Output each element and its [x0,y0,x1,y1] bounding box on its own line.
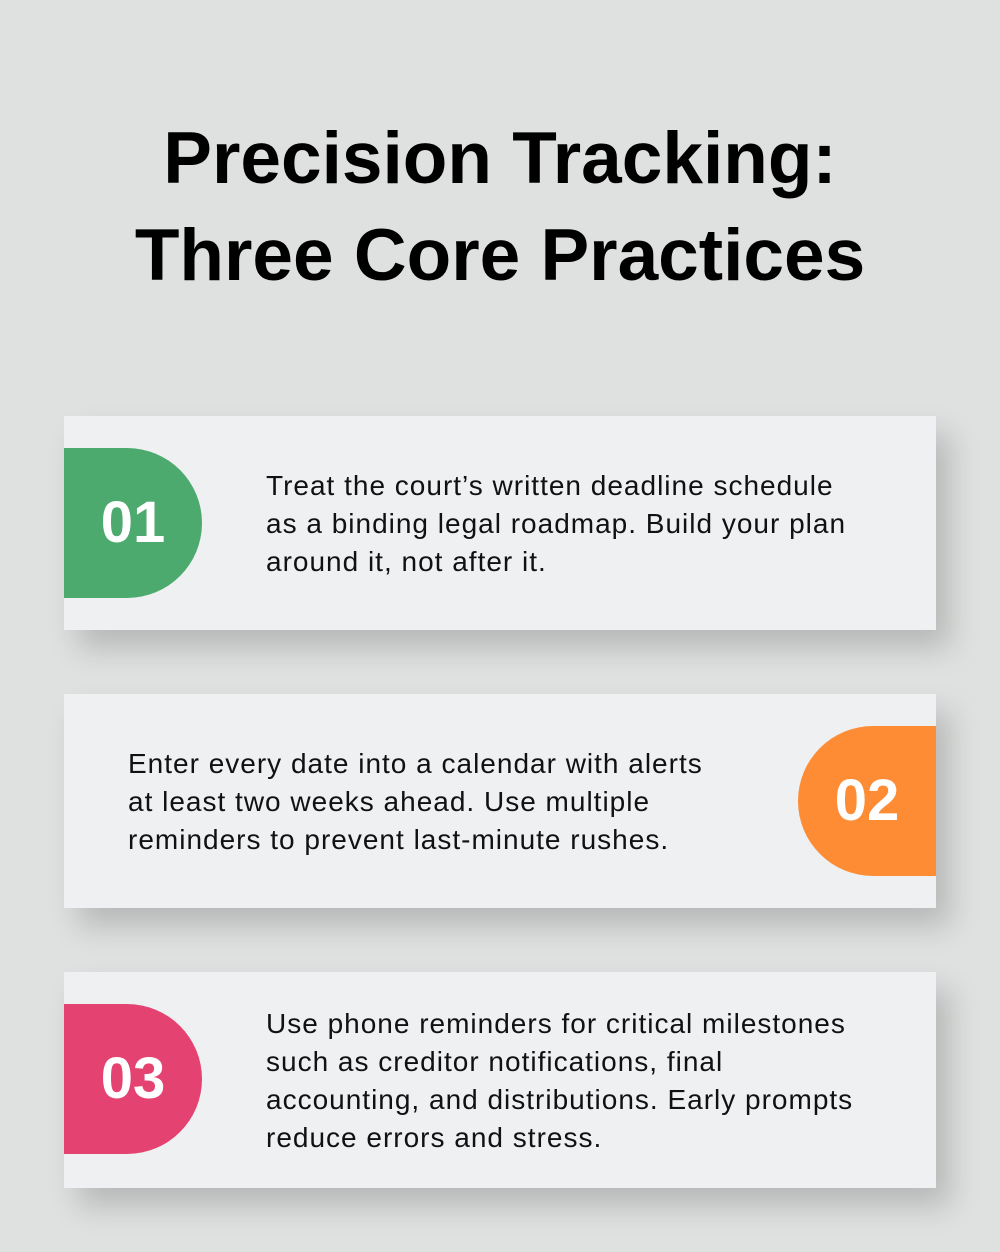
panel: practice 01 [64,416,936,630]
text 03: accounting, and distributions. Early prompts [266,1084,853,1115]
text 03: reduce errors and stress. [266,1122,602,1153]
text 02: at least two weeks ahead. Use multiple [128,786,650,817]
title [135,118,865,296]
text 02 [128,748,703,855]
text 01: Treat the court’s written deadline schedule [266,470,834,501]
badge 02 [798,726,936,876]
text 03: such as creditor notifications, final [266,1046,723,1077]
text 03: Use phone reminders for critical milestones [266,1008,846,1039]
panel: practice 02 [64,694,936,908]
panel: practice 03 [64,972,936,1188]
title: Three Core Practices [135,215,865,296]
text 01: as a binding legal roadmap. Build your plan [266,508,846,539]
text 01 [266,470,846,577]
title: Precision Tracking: [163,118,837,199]
text 02: Enter every date into a calendar with alerts [128,748,703,779]
text 02: reminders to prevent last-minute rushes. [128,824,669,855]
badge 03 [64,1004,202,1154]
badge 03: 03 [101,1046,165,1111]
badge 02: 02 [835,768,899,833]
badge 01 [64,448,202,598]
text 03 [266,1008,853,1153]
badge 01: 01 [101,490,165,555]
text 01: around it, not after it. [266,546,547,577]
